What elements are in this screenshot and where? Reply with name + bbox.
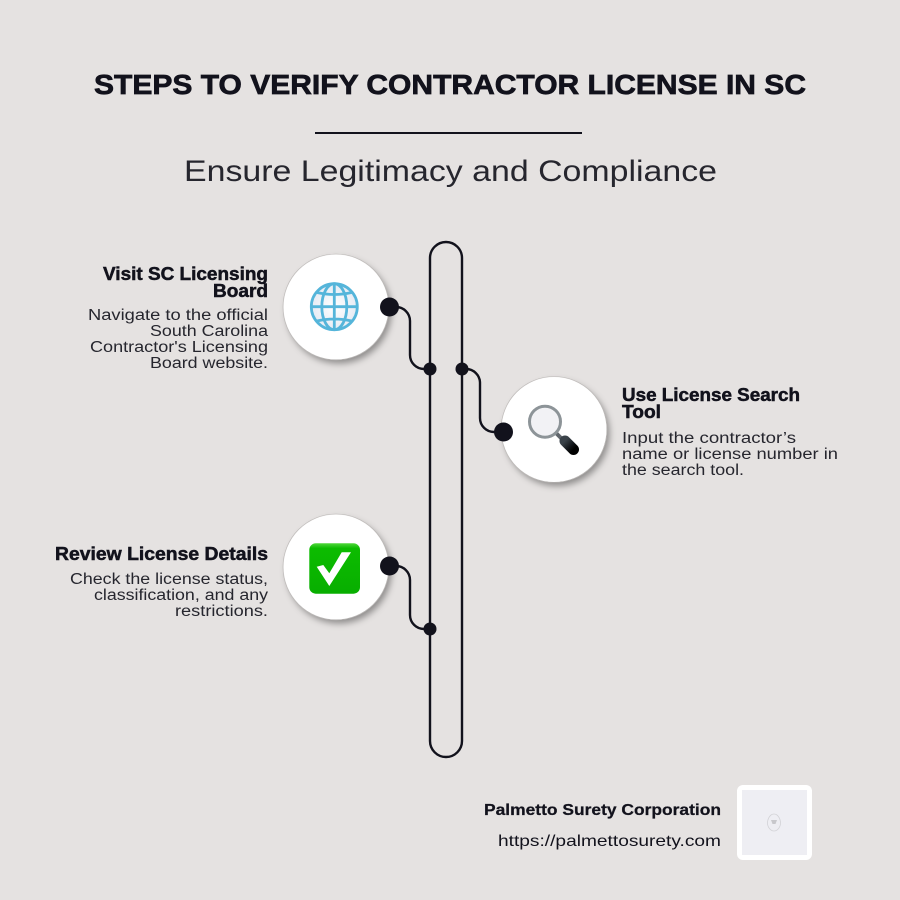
step 1 text: Navigate to the official <box>88 307 268 324</box>
title: STEPS TO VERIFY CONTRACTOR LICENSE IN SC <box>94 69 806 100</box>
step 2 text: the search tool. <box>622 462 744 479</box>
footer: url: https://palmettosurety.com <box>498 833 721 850</box>
dot: step 1 <box>380 298 399 316</box>
dot: step 3 <box>380 556 399 576</box>
step 1 text: Board <box>213 281 268 301</box>
step 1 text <box>88 264 268 372</box>
subtitle: Ensure Legitimacy and Compliance <box>184 155 717 188</box>
footer: logo <box>737 785 812 860</box>
step 1 text: Visit SC Licensing <box>103 264 268 284</box>
connector: step 3 <box>390 566 436 636</box>
timeline track <box>430 242 462 757</box>
connector: step 2 <box>456 362 504 432</box>
step 3 text: restrictions. <box>175 603 268 620</box>
step 1: icon badge globe <box>283 254 389 360</box>
step 3 text: Review License Details <box>55 544 268 564</box>
icon: globe <box>311 284 358 330</box>
icon: green check mark <box>309 543 360 594</box>
step 3 text <box>55 544 268 620</box>
connector: step 1 <box>390 307 436 376</box>
step 2 text: name or license number in <box>622 446 838 463</box>
step 3: icon badge check <box>283 514 389 620</box>
dot: step 2 <box>494 422 513 442</box>
step 2 text: Tool <box>622 402 661 422</box>
step 3 text: classification, and any <box>94 587 268 604</box>
step 2: icon badge magnifier <box>501 376 607 482</box>
icon: magnifying glass <box>530 406 574 450</box>
step 1 text: South Carolina <box>150 323 268 340</box>
footer: company name: Palmetto Surety Corporation <box>484 802 721 819</box>
step 1 text: Contractor's Licensing <box>90 339 268 356</box>
step 2 text: Use License Search <box>622 385 800 405</box>
step 2 text: Input the contractor’s <box>622 430 796 447</box>
step 3 text: Check the license status, <box>70 571 268 588</box>
step 1 text: Board website. <box>150 355 268 372</box>
step 2 text <box>622 385 838 479</box>
